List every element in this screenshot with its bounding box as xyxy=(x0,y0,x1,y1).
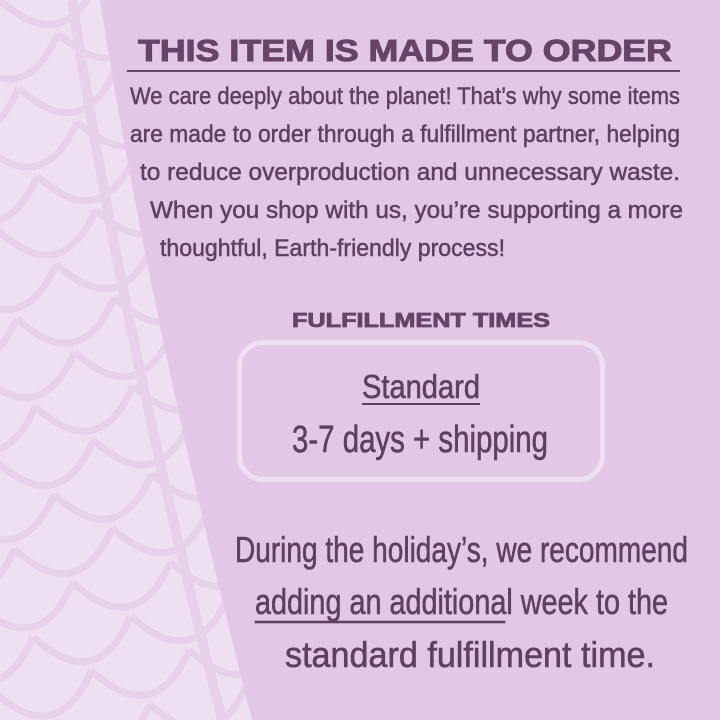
intro paragraph: When you shop with us, you’re supporting a more xyxy=(150,197,683,224)
fulfillment box xyxy=(240,342,602,480)
intro paragraph xyxy=(130,83,683,262)
intro paragraph: We care deeply about the planet! That’s why some items xyxy=(130,83,680,110)
heading: fulfillment times: FULFILLMENT TIMES xyxy=(292,310,550,332)
title: THIS ITEM IS MADE TO ORDER xyxy=(138,33,672,68)
holiday note xyxy=(235,529,688,675)
holiday note: standard fulfillment time. xyxy=(285,634,655,675)
fulfillment box: 3-7 days + shipping xyxy=(292,419,548,461)
intro paragraph: to reduce overproduction and unnecessary waste. xyxy=(140,159,680,186)
intro paragraph: are made to order through a fulfillment partner, helping xyxy=(130,121,680,148)
intro paragraph: thoughtful, Earth-friendly process! xyxy=(160,235,505,262)
decorative scale panel xyxy=(0,0,260,720)
fulfillment box: Standard xyxy=(362,368,480,405)
